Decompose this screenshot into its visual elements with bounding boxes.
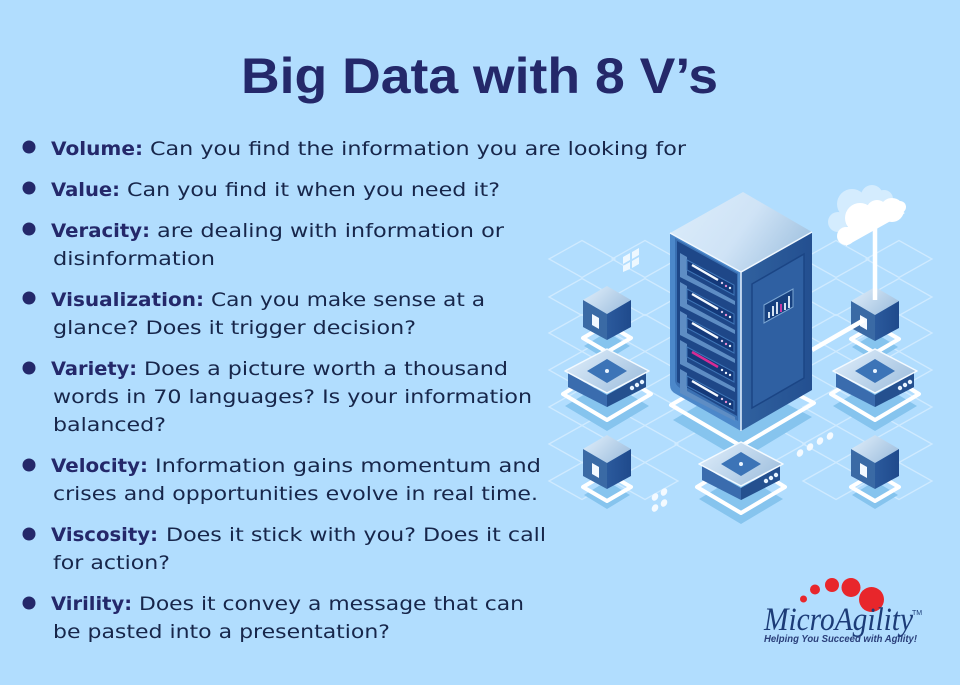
item: Variety xyxy=(22,358,532,436)
shadow and ring under server xyxy=(671,365,814,460)
server rack xyxy=(670,192,812,431)
item: Velocity: crises and opportunities evolve in real time. xyxy=(53,483,538,505)
item: Virility xyxy=(22,593,524,643)
logo tagline: Helping You Succeed with Agility! xyxy=(764,633,917,645)
server rack units xyxy=(680,253,735,421)
item: Visualization: glance? Does it trigger decision? xyxy=(53,317,416,339)
item: Virility: be pasted into a presentation? xyxy=(53,621,390,643)
icon: node bottom xyxy=(697,442,785,524)
item: Visualization xyxy=(22,289,485,339)
item: Viscosity: Does it stick with you? Does it call xyxy=(166,524,546,546)
item: Variety: Variety: xyxy=(51,358,137,380)
item: Variety: balanced? xyxy=(53,414,166,436)
icon: window tiles xyxy=(623,248,639,272)
icon: small cube top left xyxy=(583,286,631,360)
item: Velocity xyxy=(22,455,541,505)
item: Visualization: Can you make sense at a xyxy=(211,289,485,311)
title: Big Data with 8 V’s xyxy=(241,48,718,104)
item: Virility: Does it convey a message that can xyxy=(139,593,524,615)
item: Veracity: are dealing with information or xyxy=(157,220,504,242)
item: Viscosity: for action? xyxy=(53,552,170,574)
icon: small cube bottom left xyxy=(583,435,631,509)
bullet list: the 8 V's xyxy=(22,138,686,643)
item: Viscosity: Viscosity: xyxy=(51,524,158,546)
item: Velocity: Information gains momentum and xyxy=(155,455,541,477)
icon: four dots xyxy=(650,487,669,513)
item: Volume xyxy=(22,138,686,160)
item: Visualization: Visualization: xyxy=(51,289,204,311)
icon: small cube top right xyxy=(851,287,899,361)
icon: small cube bottom right xyxy=(851,435,899,509)
icon: cloud with uplink xyxy=(828,185,906,300)
item: Veracity xyxy=(22,220,504,270)
icon: node left xyxy=(563,349,651,431)
item: Variety: Does a picture worth a thousand xyxy=(144,358,508,380)
server door panel xyxy=(752,254,804,408)
logo red circles xyxy=(800,578,884,612)
item: Value: Value: xyxy=(51,179,120,201)
logo trademark: TM xyxy=(912,610,922,617)
item: Veracity: Veracity: xyxy=(51,220,150,242)
logo wordmark: MicroAgility xyxy=(763,602,913,638)
item: Volume: Can you find the information you are looking for xyxy=(150,138,686,160)
icon: node right xyxy=(831,349,919,431)
item: Viscosity xyxy=(22,524,546,574)
item: Value: Can you find it when you need it? xyxy=(127,179,500,201)
item: Veracity: disinformation xyxy=(53,248,215,270)
item: Value xyxy=(22,179,500,201)
logo: MicroAgility xyxy=(763,578,922,645)
server status chart xyxy=(764,289,793,323)
isometric data center illustration xyxy=(549,185,932,524)
icon: dotted link xyxy=(795,431,835,458)
connector: server to cube xyxy=(812,320,864,350)
item: Virility: Virility: xyxy=(51,593,132,615)
item: Volume: Volume: xyxy=(51,138,143,160)
item: Variety: words in 70 languages? Is your information xyxy=(53,386,532,408)
item: Velocity: Velocity: xyxy=(51,455,148,477)
